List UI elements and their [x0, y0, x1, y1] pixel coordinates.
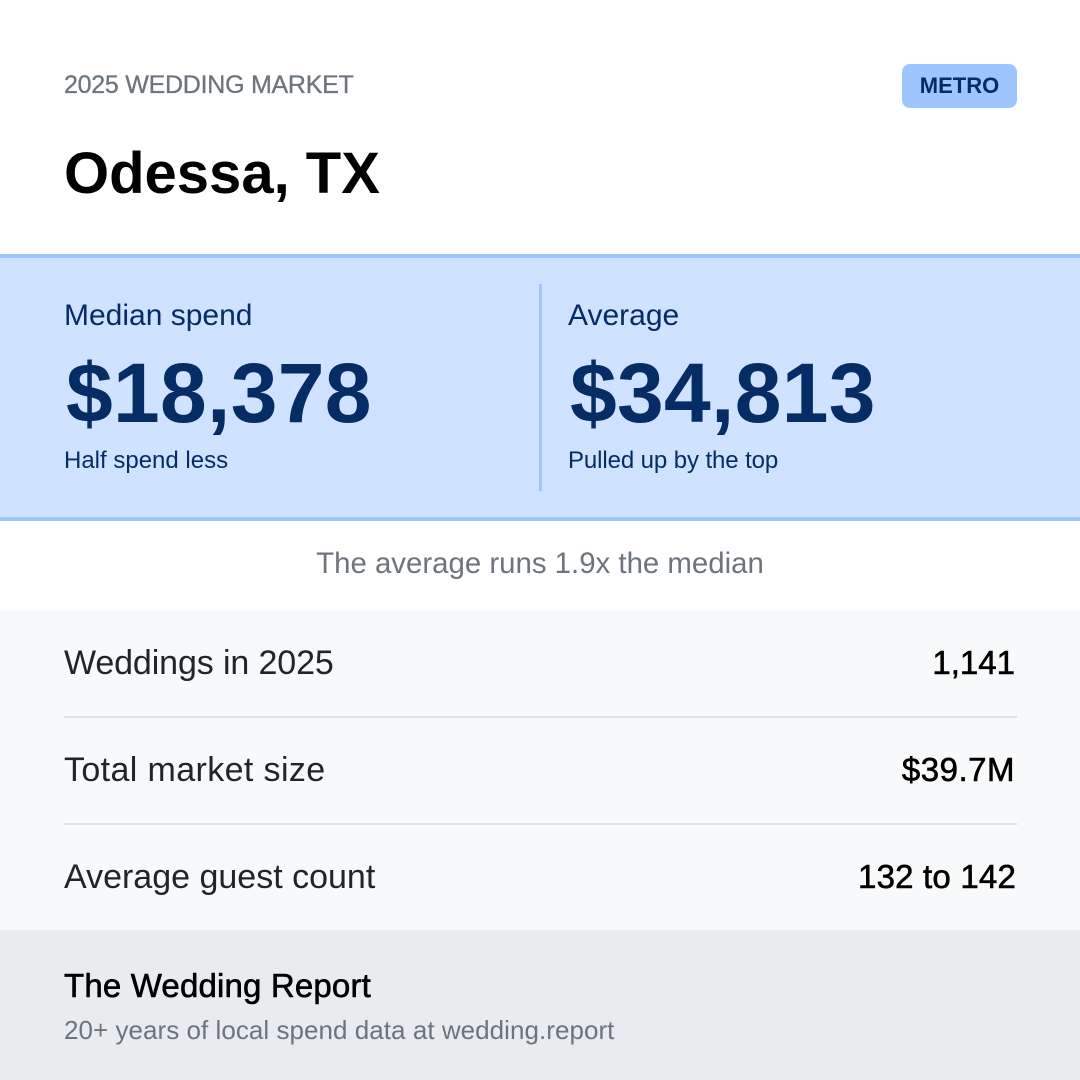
- average note: Pulled up by the top: [568, 447, 778, 474]
- panel: market stats: [0, 610, 1080, 930]
- average value: $34,813: [570, 346, 876, 440]
- footer tagline: 20+ years of local spend data at wedding.report: [64, 1015, 614, 1045]
- row: weddings: [64, 610, 1017, 718]
- title: Odessa, TX: [64, 141, 380, 206]
- row: guest count: [64, 858, 1016, 896]
- badge: metro: METRO: [920, 73, 999, 98]
- row value: 1,141: [932, 644, 1015, 681]
- median value: $18,378: [66, 346, 372, 440]
- footer: [0, 930, 1080, 1080]
- row value: $39.7M: [902, 751, 1015, 788]
- median note: Half spend less: [64, 447, 228, 474]
- panel: spend statistics: [0, 254, 1080, 521]
- row value: 132 to 142: [858, 858, 1016, 895]
- divider: [539, 284, 542, 491]
- badge: metro: [902, 64, 1017, 108]
- row label: Total market size: [64, 751, 326, 789]
- row label: Average guest count: [64, 858, 375, 896]
- header: eyebrow label: 2025 WEDDING MARKET: [64, 71, 354, 99]
- row: market size: [64, 717, 1017, 825]
- median label: Median spend: [64, 299, 252, 332]
- stat: average spend: [568, 299, 876, 474]
- comparison note: The average runs 1.9x the median: [316, 547, 764, 580]
- stat: median spend: [64, 299, 372, 474]
- average label: Average: [568, 299, 679, 332]
- footer brand: The Wedding Report: [64, 967, 371, 1004]
- row label: Weddings in 2025: [64, 644, 334, 682]
